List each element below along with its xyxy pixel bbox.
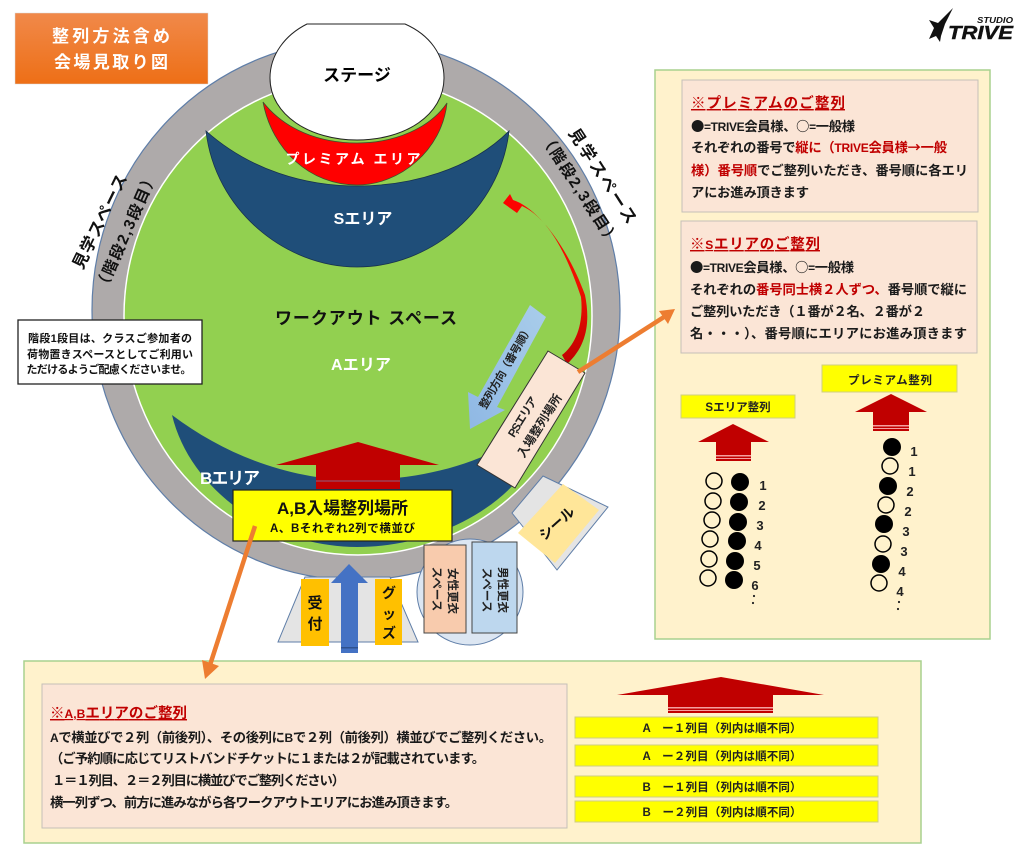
panel: premium instructions: ※プレミアムのご整列 <box>691 92 845 113</box>
arrow: S area queue direction <box>698 424 769 461</box>
premium queue diagram <box>871 438 918 610</box>
arrow: blue entrance <box>331 564 368 653</box>
panel: premium instructions: それぞれの番号で縦に（TRIVE会員様→一般 <box>691 137 948 156</box>
note: stair first tier: 階段1段目は、クラスご参加者の <box>28 331 192 345</box>
A row 1 bar: A ー１列目（列内は順不同） <box>642 721 802 735</box>
A area label: Aエリア <box>331 357 391 374</box>
panel: premium instructions: ●=TRIVE会員様、○=一般様 <box>691 116 856 135</box>
men's changing space <box>472 542 517 633</box>
premium queue diagram: 1 <box>908 464 916 479</box>
panel: A,B area instructions: Aで横並びで２列（前後列）、その後列にBで２列（前後列）横並びでご整列ください。 <box>50 729 552 745</box>
workout space label: ワークアウト スペース <box>275 309 457 328</box>
premium queue diagram: 3 <box>902 524 910 539</box>
seal table <box>512 476 608 570</box>
premium queue label <box>822 365 957 392</box>
panel: A,B area instructions: 横一列ずつ、前方に進みながら各ワークアウトエリアにお進み頂きます。 <box>50 794 458 810</box>
B area crescent: Bエリア <box>200 469 260 488</box>
left viewing space label: （階段2,3段目） <box>92 170 161 294</box>
panel: A,B area instructions: （ご予約順に応じてリストバンドチケットに１または２が記載されています。 <box>50 750 485 766</box>
panel: S area instructions <box>681 221 977 353</box>
floor plan: outer grey ring <box>92 40 620 580</box>
right viewing space label: （階段2,3段目） <box>537 130 622 248</box>
reception box: 付 <box>307 616 323 633</box>
panel: A,B area instructions: １＝１列目、２＝２列目に横並びでご整列ください） <box>52 772 345 788</box>
premium queue diagram: 4 <box>896 584 904 599</box>
panel: S area instructions: それぞれの番号同士横２人ずつ、番号順で縦に <box>690 281 967 297</box>
A row 2 bar <box>575 745 878 766</box>
arrow: orange to S panel <box>578 309 675 372</box>
S area queue diagram <box>700 473 767 604</box>
panel: right instructions <box>655 70 990 639</box>
right viewing space label: 見学スペース <box>565 124 641 227</box>
title box <box>15 13 208 84</box>
S area queue diagram: 1 <box>759 478 767 493</box>
arrow: queue direction <box>468 305 546 429</box>
panel: S area instructions: ●=TRIVE会員様、○=一般様 <box>690 257 855 276</box>
goods box: グ <box>382 585 396 601</box>
S area queue diagram: 5 <box>753 558 761 573</box>
panel: S area instructions: ※Sエリアのご整列 <box>690 233 820 254</box>
S area queue diagram: 4 <box>754 538 762 553</box>
S area queue label: Sエリア整列 <box>705 400 771 414</box>
premium queue diagram: 1 <box>910 444 918 459</box>
note: stair first tier <box>18 320 202 384</box>
S area queue label <box>681 395 795 418</box>
A,B queue box: A,B入場整列場所 <box>277 499 408 518</box>
B row 2 bar: B ー２列目（列内は順不同） <box>642 805 802 819</box>
logo: studio trive: STUDIO <box>977 16 1014 25</box>
premium area crescent: プレミアム エリア <box>286 151 420 167</box>
reception box <box>301 579 329 646</box>
S area crescent <box>206 131 509 267</box>
arrow: A,B queue direction <box>617 677 824 713</box>
S area queue diagram: 6 <box>751 578 759 593</box>
men's changing space: 男性更衣 <box>496 567 510 613</box>
logo: studio trive: TRIVE <box>948 23 1014 43</box>
panel: bottom instructions <box>24 661 921 843</box>
P,S area entrance queue box: 入場整列場所 <box>514 391 565 460</box>
panel: premium instructions <box>682 80 978 212</box>
women's changing space <box>424 545 466 633</box>
B area crescent <box>172 415 548 547</box>
premium queue diagram: 2 <box>904 504 912 519</box>
premium queue label: プレミアム整列 <box>848 373 932 387</box>
S area queue diagram: 2 <box>758 498 766 513</box>
arrow: orange to A,B panel <box>202 526 255 679</box>
women's changing space: スペース <box>430 567 442 611</box>
premium queue diagram: 2 <box>906 484 914 499</box>
panel: S area instructions: ご整列いただき（１番が２名、２番が２ <box>690 303 925 319</box>
panel: A,B area instructions <box>42 684 567 828</box>
title box: 会場見取り図 <box>54 53 168 72</box>
arrow: premium queue direction <box>855 394 927 431</box>
B row 2 bar <box>575 801 878 822</box>
men's changing space: スペース <box>480 568 492 612</box>
goods box: ズ <box>382 625 396 641</box>
goods box: ッ <box>382 606 396 622</box>
goods box <box>375 579 402 645</box>
A,B queue box: A、Bそれぞれ2列で横並び <box>270 521 416 535</box>
premium area crescent <box>263 102 447 185</box>
P,S area entrance queue box: P,Sエリア <box>506 395 540 440</box>
P,S area entrance queue box <box>477 351 585 488</box>
note: stair first tier: ただけるようご配慮くださいませ。 <box>26 362 192 376</box>
premium queue diagram: 4 <box>898 564 906 579</box>
panel: A,B area instructions: ※A,Bエリアのご整列 <box>50 702 187 723</box>
left viewing space label: 見学スペース <box>68 171 131 272</box>
A,B queue box <box>233 490 452 541</box>
stage <box>270 24 444 140</box>
panel: S area instructions: 名・・・）、番号順にエリアにお進み頂きます <box>690 325 967 341</box>
entrance trapezoid <box>278 577 418 642</box>
arrow: queue direction: 整列方向（番号順） <box>476 323 535 411</box>
floor plan: green workout area <box>124 77 592 555</box>
S area crescent: Sエリア <box>334 211 392 228</box>
arrow: red curved to S area <box>503 194 587 364</box>
B row 1 bar <box>575 776 878 797</box>
logo: studio trive <box>929 8 1014 43</box>
S area queue diagram: 3 <box>756 518 764 533</box>
seal table: シール <box>536 503 578 543</box>
women's changing space: 女性更衣 <box>446 568 460 614</box>
arrow: dark red entrance direction <box>276 442 439 489</box>
changing room circle <box>417 539 523 645</box>
A row 2 bar: A ー２列目（列内は順不同） <box>642 749 802 763</box>
title box: 整列方法含め <box>52 26 170 46</box>
note: stair first tier: 荷物置きスペースとしてご利用い <box>27 347 193 361</box>
premium queue diagram: 3 <box>900 544 908 559</box>
A row 1 bar <box>575 717 878 738</box>
stage: ステージ <box>323 66 391 85</box>
reception box: 受 <box>307 594 323 612</box>
panel: premium instructions: アにお進み頂きます <box>691 185 809 200</box>
B row 1 bar: B ー１列目（列内は順不同） <box>642 780 802 794</box>
panel: premium instructions: 様）番号順でご整列いただき、番号順に各エリ <box>691 162 968 178</box>
